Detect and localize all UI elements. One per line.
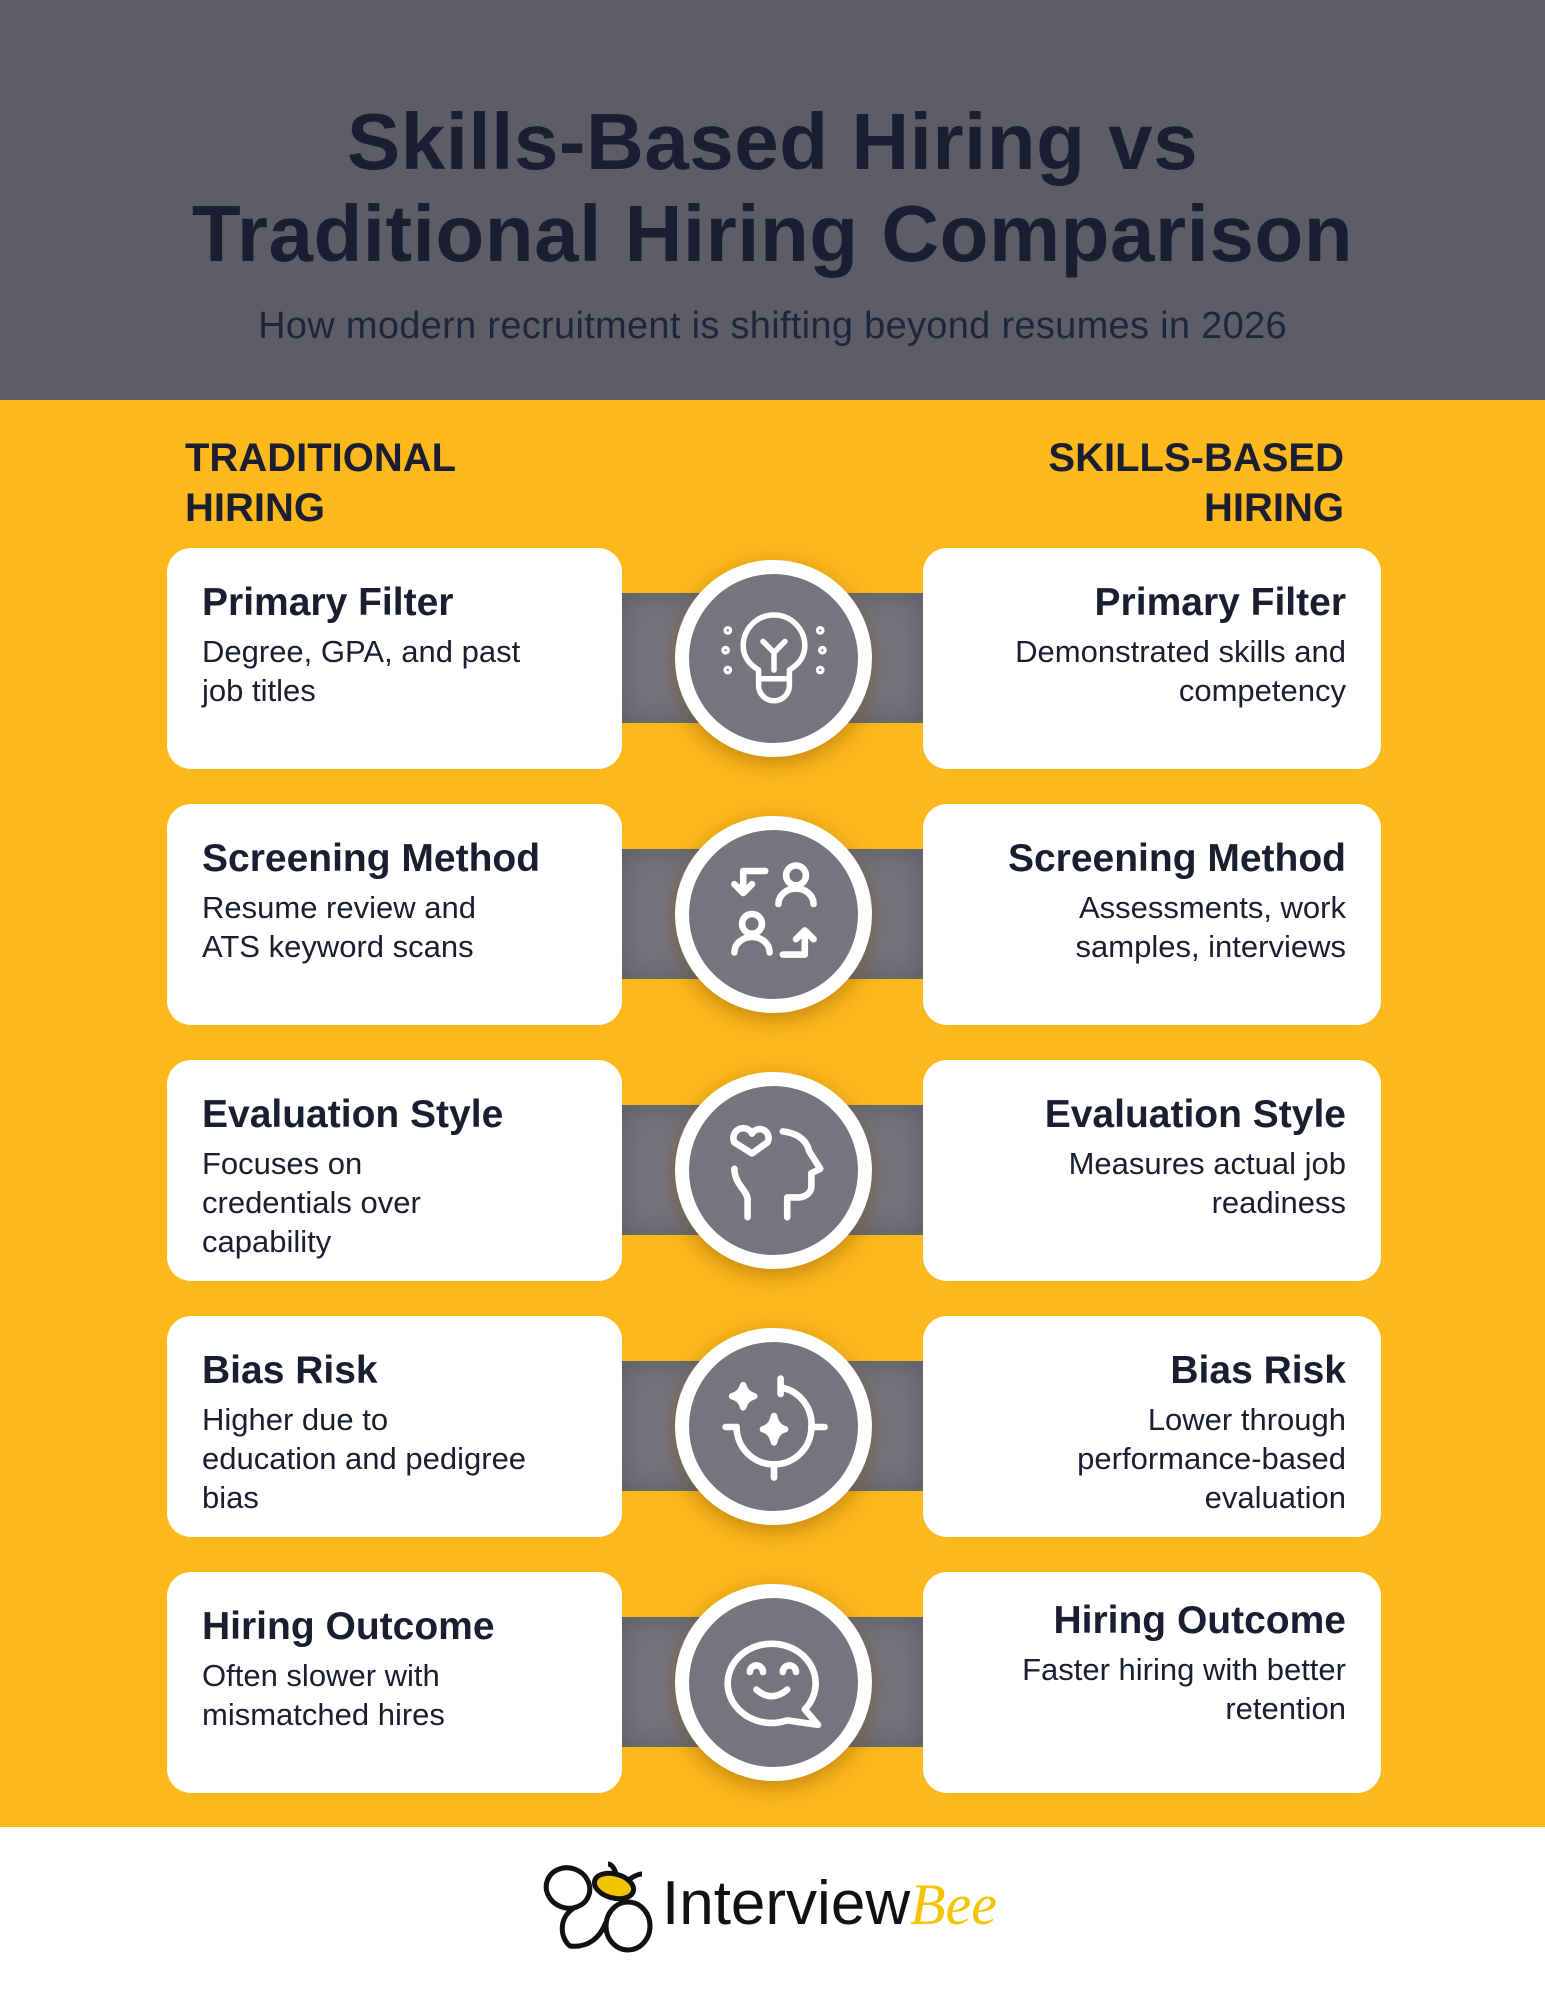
card: traditional screening: Screening Method: [202, 837, 540, 880]
icon: smiling chat bubble: [675, 1584, 872, 1781]
card: skills outcome: [923, 1572, 1381, 1793]
card: skills evaluation: readiness: [1212, 1185, 1346, 1220]
card: traditional outcome: mismatched hires: [202, 1697, 445, 1732]
card: traditional evaluation: Focuses on: [202, 1146, 362, 1181]
card: skills bias: Bias Risk: [1170, 1349, 1346, 1392]
card: skills screening: [923, 804, 1381, 1025]
card: skills primary filter: Primary Filter: [1095, 581, 1346, 624]
card: skills screening: Assessments, work: [1079, 890, 1346, 925]
card: traditional outcome: Often slower with: [202, 1658, 440, 1693]
card: traditional screening: ATS keyword scans: [202, 929, 474, 964]
card: traditional primary filter: [167, 548, 622, 769]
card: traditional evaluation: credentials over: [202, 1185, 421, 1220]
card: traditional bias: [167, 1316, 622, 1537]
connector row 2: [621, 849, 923, 979]
card: skills screening: samples, interviews: [1076, 929, 1346, 964]
card: traditional bias: bias: [202, 1480, 259, 1515]
card: traditional primary filter: Primary Filter: [202, 581, 453, 624]
card: traditional screening: Resume review and: [202, 890, 476, 925]
card: skills outcome: Faster hiring with better: [1022, 1652, 1346, 1687]
card: traditional bias: education and pedigree: [202, 1441, 526, 1476]
card: skills evaluation: Evaluation Style: [1045, 1093, 1346, 1136]
connector row 4: [621, 1361, 923, 1491]
card: skills bias: [923, 1316, 1381, 1537]
card: skills primary filter: [923, 548, 1381, 769]
card: traditional screening: [167, 804, 622, 1025]
subtitle: How modern recruitment is shifting beyond resumes in 2026: [258, 305, 1287, 347]
icon: head with heart: [675, 1072, 872, 1269]
footer logo: [544, 1862, 997, 1952]
card: skills screening: Screening Method: [1008, 837, 1346, 880]
card: skills bias: performance-based: [1077, 1441, 1346, 1476]
card: skills bias: Lower through: [1148, 1402, 1346, 1437]
title: Traditional Hiring Comparison: [192, 189, 1353, 278]
card: skills outcome: retention: [1225, 1691, 1346, 1726]
card: skills primary filter: competency: [1179, 673, 1346, 708]
icon: bee: [544, 1862, 652, 1952]
card: skills bias: evaluation: [1205, 1480, 1346, 1515]
column heading: traditional: [185, 436, 456, 530]
header band: [0, 0, 1545, 400]
logo wordmark: InterviewBee: [662, 1869, 997, 1938]
card: traditional evaluation: Evaluation Style: [202, 1093, 503, 1136]
card: skills primary filter: Demonstrated skills and: [1015, 634, 1346, 669]
icon: lightbulb: [675, 560, 872, 757]
card: traditional primary filter: Degree, GPA, and past: [202, 634, 520, 669]
card: skills outcome: Hiring Outcome: [1053, 1599, 1346, 1642]
yellow comparison band: [0, 400, 1545, 1827]
card: traditional outcome: [167, 1572, 622, 1793]
column heading: skills-based: [1048, 436, 1344, 530]
icon: people swap: [675, 816, 872, 1013]
connector row 1: [621, 593, 923, 723]
title: [192, 97, 1353, 278]
column heading: skills-based: HIRING: [1204, 486, 1344, 530]
card: traditional bias: Higher due to: [202, 1402, 388, 1437]
card: traditional evaluation: [167, 1060, 622, 1281]
card: traditional bias: Bias Risk: [202, 1349, 378, 1392]
card: traditional primary filter: job titles: [202, 673, 316, 708]
card: traditional evaluation: capability: [202, 1224, 331, 1259]
column heading: traditional: TRADITIONAL: [185, 436, 456, 480]
icon: target with sparkles: [675, 1328, 872, 1525]
card: skills evaluation: Measures actual job: [1069, 1146, 1346, 1181]
card: traditional outcome: Hiring Outcome: [202, 1605, 495, 1648]
column heading: skills-based: SKILLS-BASED: [1048, 436, 1344, 480]
column heading: traditional: HIRING: [185, 486, 325, 530]
card: skills evaluation: [923, 1060, 1381, 1281]
title: Skills-Based Hiring vs: [347, 97, 1198, 186]
connector row 3: [621, 1105, 923, 1235]
connector row 5: [621, 1617, 923, 1747]
